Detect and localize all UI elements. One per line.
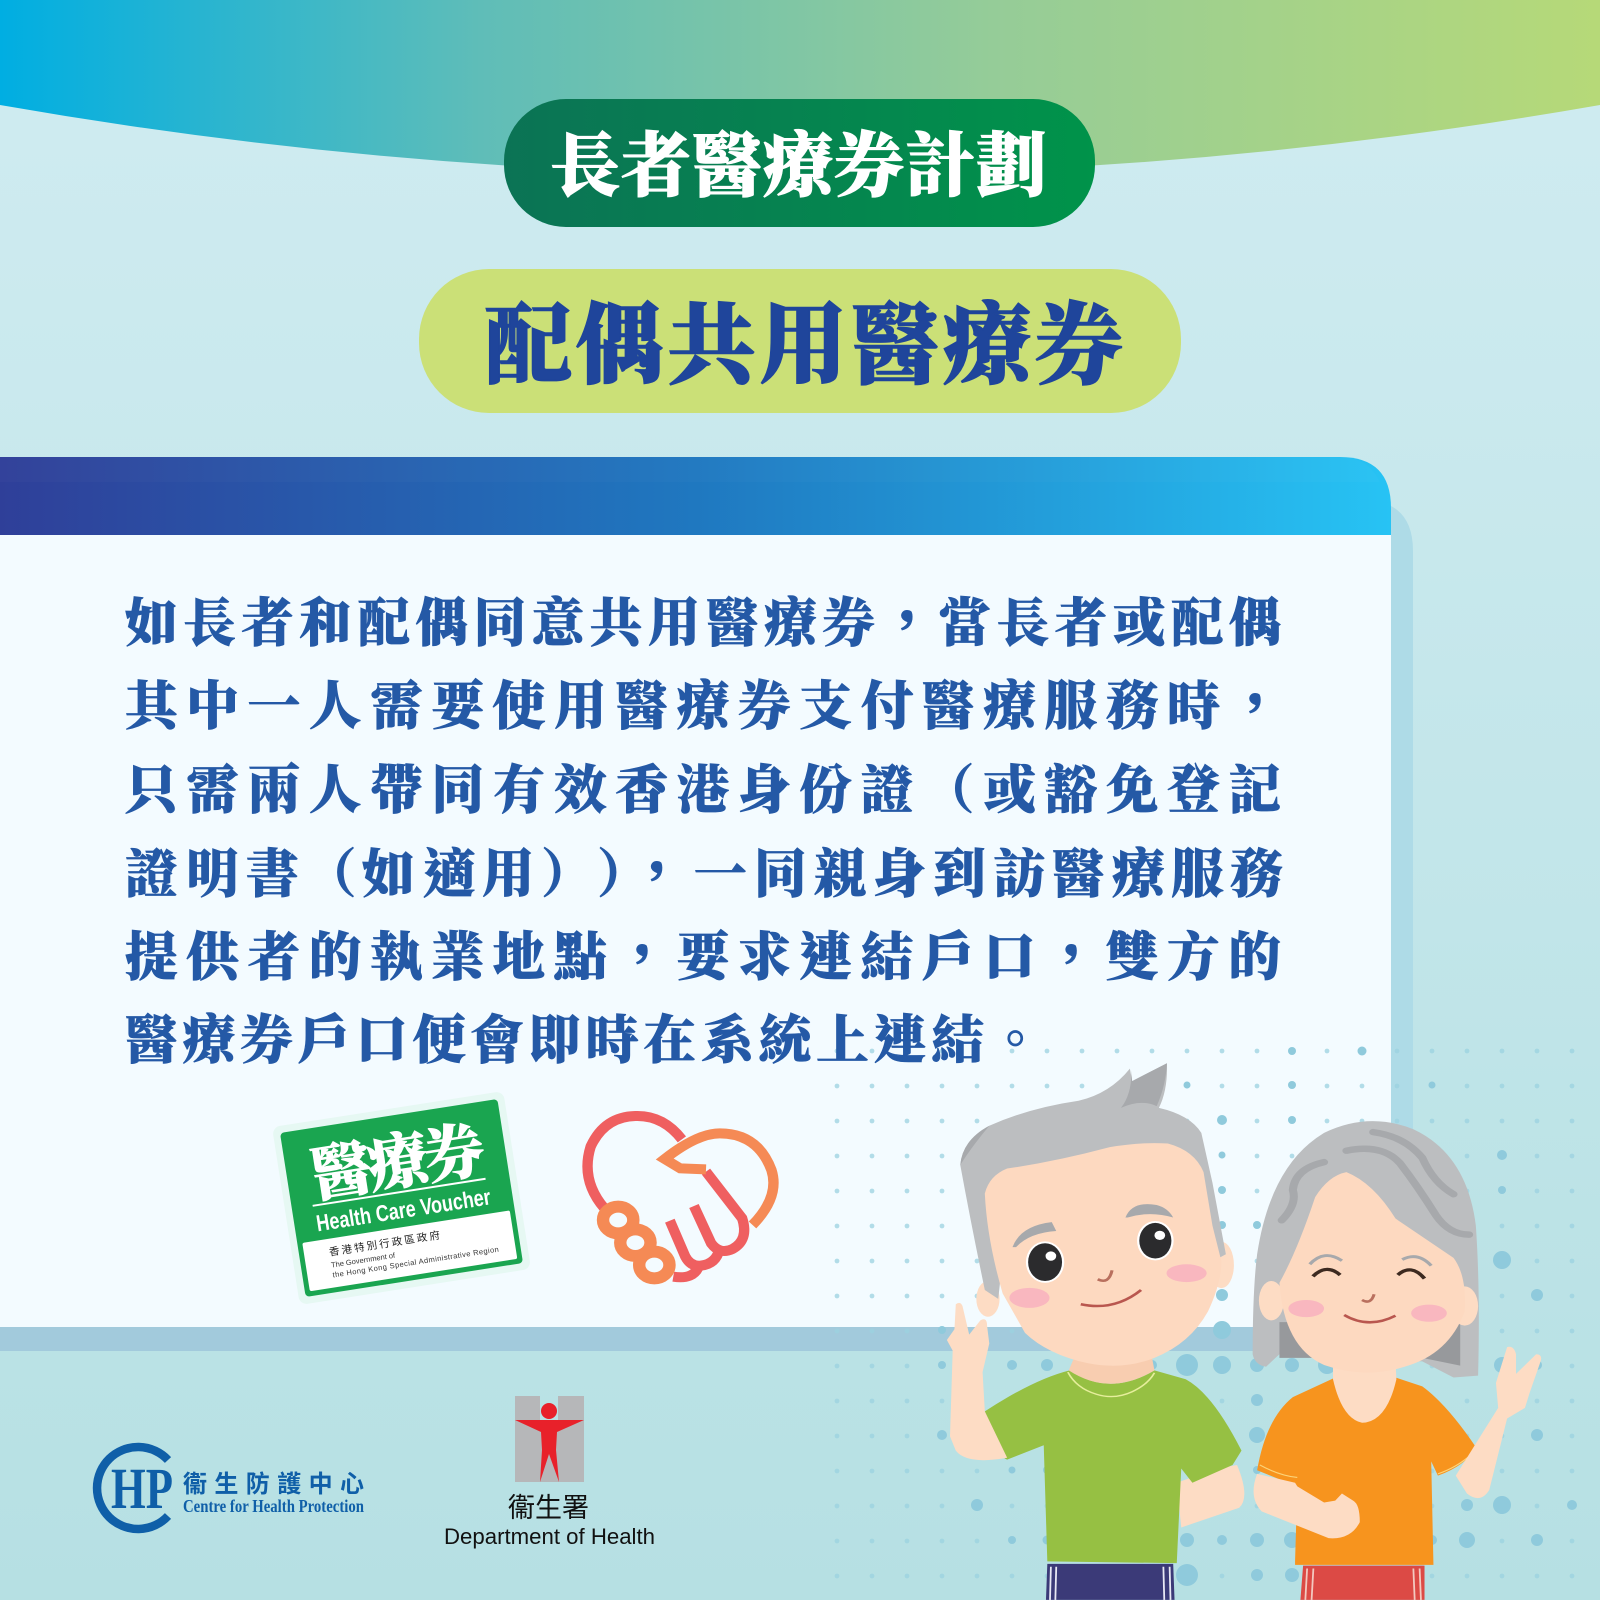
icon: health care voucher card [272,1091,531,1305]
logo: Centre for Health Protection [97,1447,371,1529]
body text: 醫療券戶口便會即時在系統上連結。 [125,1011,1047,1070]
top gradient arc [0,0,1600,175]
logo: Department of Health [444,1396,655,1549]
body text: 證明書（如適用）），一同親身到訪醫療服務 [125,845,1283,904]
body text: 提供者的執業地點，要求連結戶口，雙方的 [125,928,1290,987]
icon: health care voucher card: 醫療券 [307,1116,489,1209]
illustration: elderly couple [947,1063,1541,1600]
logo: Department of Health: 衞生署 [508,1493,589,1523]
logo: Centre for Health Protection: Centre for Health Protection [183,1496,364,1516]
subtitle pill [419,269,1181,413]
icon: handshake heart [588,1116,773,1278]
title text: 長者醫療券計劃 [550,127,1047,206]
woman [1253,1121,1541,1600]
body text: 只需兩人帶同有效香港身份證（或豁免登記 [125,761,1290,820]
panel bottom shadow [0,1327,1391,1351]
logo: Department of Health: Department of Health [444,1524,655,1549]
panel shadow [0,500,1413,1351]
halftone dots [825,1045,1600,1600]
title pill [504,99,1095,227]
man [947,1063,1244,1600]
subtitle text: 配偶共用醫療券 [484,298,1127,396]
icon: health care voucher card: Health Care Voucher [314,1183,492,1236]
logo: Centre for Health Protection: 衞生防護中心 [183,1471,371,1498]
panel header band [0,457,1391,535]
panel: body background [0,535,1391,1327]
logo: Centre for Health Protection: HP [111,1456,173,1521]
body text [125,594,1290,1070]
icon: health care voucher card: the Hong Kong Special Administrative Region [332,1245,499,1280]
icon: health care voucher card: 香港特別行政區政府 [328,1228,443,1259]
body text: 其中一人需要使用醫療券支付醫療服務時， [125,677,1290,736]
body text: 如長者和配偶同意共用醫療券，當長者或配偶 [125,594,1287,653]
icon: health care voucher card: The Government of [330,1251,397,1270]
